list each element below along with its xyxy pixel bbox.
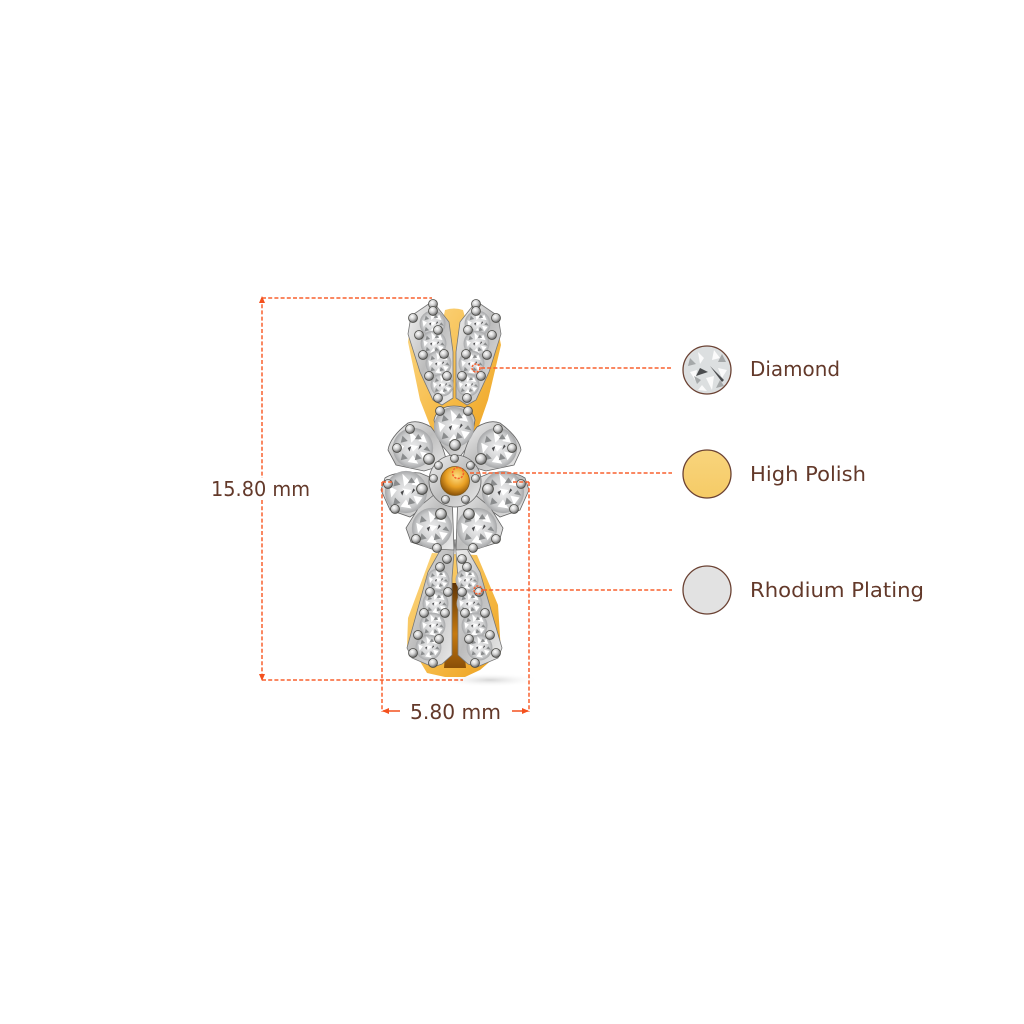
legend: high polish <box>683 450 866 498</box>
width label: 5.80 mm <box>410 700 501 724</box>
ground shadow <box>440 673 540 687</box>
leader: high polish <box>452 468 672 478</box>
icon: gold swatch <box>683 450 731 498</box>
prongs <box>384 300 526 668</box>
bottom right silver petal <box>455 540 502 667</box>
diamonds <box>385 311 524 660</box>
flower silver petals <box>381 406 529 550</box>
leader: rhodium plating <box>474 586 672 594</box>
icon: rhodium swatch <box>683 566 731 614</box>
icon: diamond swatch <box>683 346 731 394</box>
top gold backing <box>408 308 501 446</box>
legend: rhodium plating <box>683 566 924 614</box>
dimension: width 5.80 mm <box>382 482 529 724</box>
label: Diamond <box>750 357 840 381</box>
dimension: height 15.80 mm <box>211 296 463 681</box>
height label: 15.80 mm <box>211 477 310 501</box>
label: High Polish <box>750 462 866 486</box>
gold centre ball <box>440 466 470 496</box>
leader: diamond <box>472 364 672 372</box>
bottom left silver petal <box>407 540 455 667</box>
bottom gold backing <box>407 553 501 677</box>
jewellery: earring product image <box>381 300 540 687</box>
legend: diamond <box>683 346 840 394</box>
top right silver petal <box>456 301 501 405</box>
label: Rhodium Plating <box>750 578 924 602</box>
top left silver petal <box>408 301 453 405</box>
bottom inner dark gold <box>444 583 466 668</box>
